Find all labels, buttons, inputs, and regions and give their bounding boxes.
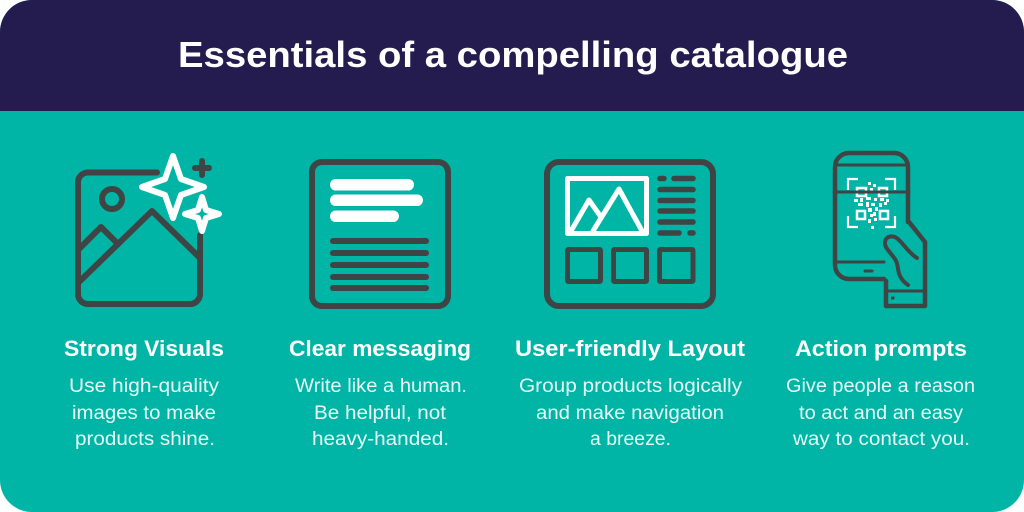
column: Clear messaging [289, 336, 471, 450]
scan line [834, 190, 909, 194]
hand [886, 222, 925, 306]
column: User-friendly Layout: Group products logically [519, 376, 743, 397]
column: Clear messaging: Be helpful, not [314, 403, 447, 424]
column: User-friendly Layout: User-friendly Layout [515, 336, 746, 361]
column: Action prompts: Give people a reason [786, 376, 975, 397]
QR code [848, 179, 895, 229]
column: Strong Visuals [64, 336, 224, 450]
icon: page layout [547, 162, 713, 306]
hero image frame [568, 178, 646, 234]
column: Clear messaging: Clear messaging [289, 336, 471, 361]
column: Action prompts: to act and an easy [799, 403, 964, 424]
column: Strong Visuals: Strong Visuals [64, 336, 224, 361]
header banner [0, 0, 1024, 111]
column: Action prompts [786, 336, 975, 450]
column: Strong Visuals: Use high-quality [69, 376, 220, 397]
column: User-friendly Layout: a breeze. [590, 429, 671, 450]
icon: phone scanning QR code [834, 153, 925, 306]
column: Strong Visuals: images to make [72, 403, 216, 424]
column: Strong Visuals: products shine. [75, 429, 215, 450]
title: Essentials of a compelling catalogue [178, 34, 848, 75]
column: Action prompts: way to contact you. [792, 429, 970, 450]
dark body lines [330, 238, 429, 291]
text lines [660, 178, 693, 233]
column: Clear messaging: Write like a human. [295, 376, 467, 397]
column: User-friendly Layout [515, 336, 746, 450]
thumbnails [568, 250, 693, 282]
column: Action prompts: Action prompts [795, 336, 967, 361]
icon: text document [312, 162, 448, 306]
column: User-friendly Layout: and make navigation [536, 403, 724, 424]
icon: image with sparkles [78, 156, 219, 304]
column: Clear messaging: heavy-handed. [312, 429, 449, 450]
white headline bars [330, 179, 423, 222]
